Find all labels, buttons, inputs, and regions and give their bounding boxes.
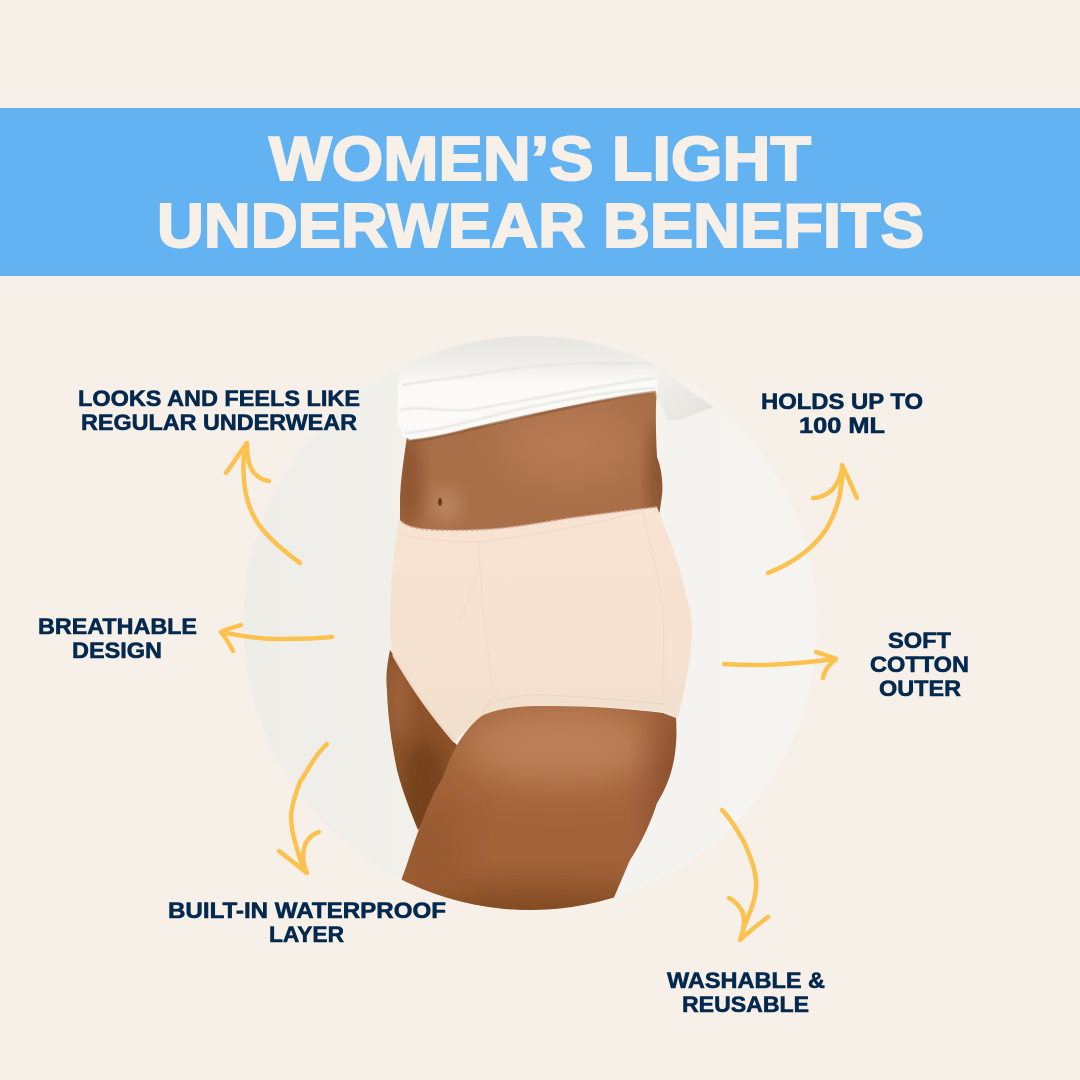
- label: breathable design: DESIGN: [72, 638, 162, 663]
- title: [157, 125, 924, 261]
- label: washable and reusable: [667, 968, 825, 1017]
- label: breathable design: [38, 614, 197, 663]
- underwear brief: [390, 507, 692, 743]
- background circle: [243, 336, 817, 910]
- navel: [438, 498, 442, 506]
- label: holds up to 100 ml: HOLDS UP TO: [761, 389, 923, 414]
- label: looks and feels like regular underwear: LOOKS AND FEELS LIKE: [78, 386, 360, 411]
- label: holds up to 100 ml: 100 ML: [799, 413, 885, 438]
- label: soft cotton outer: COTTON: [870, 652, 969, 677]
- label: built-in waterproof layer: LAYER: [269, 922, 344, 947]
- arrow: waterproof: [279, 744, 327, 873]
- title: WOMEN’S LIGHT: [269, 125, 811, 194]
- arrow: holds up to: [768, 465, 857, 573]
- back leg: [386, 650, 457, 830]
- label: washable and reusable: REUSABLE: [682, 992, 809, 1017]
- front thigh: [402, 706, 676, 910]
- label: looks and feels like regular underwear: [78, 386, 360, 435]
- shirt underside shadow: [412, 392, 656, 441]
- underwear waistband edge and seams: [393, 507, 664, 740]
- label: soft cotton outer: SOFT: [888, 628, 952, 653]
- arrow: soft cotton: [724, 652, 836, 678]
- label: looks and feels like regular underwear: REGULAR UNDERWEAR: [81, 410, 357, 435]
- title: UNDERWEAR BENEFITS: [157, 192, 924, 261]
- shirt fold shadows: [400, 363, 656, 433]
- torso skin: [400, 392, 662, 530]
- label: built-in waterproof layer: BUILT-IN WATERPROOF: [168, 898, 446, 923]
- title banner: [0, 108, 1080, 276]
- arrow: washable: [722, 810, 768, 940]
- arrow: looks and feels: [226, 443, 300, 563]
- shirt knot: [654, 385, 713, 420]
- label: soft cotton outer: [870, 628, 969, 701]
- white shirt: [397, 336, 658, 440]
- label: soft cotton outer: OUTER: [879, 676, 961, 701]
- label: washable and reusable: WASHABLE &: [667, 968, 825, 993]
- arrow: breathable: [221, 625, 332, 651]
- label: breathable design: BREATHABLE: [38, 614, 197, 639]
- photo: torso wearing underwear: [380, 336, 714, 939]
- label: holds up to 100 ml: [761, 389, 923, 438]
- label: built-in waterproof layer: [168, 898, 446, 947]
